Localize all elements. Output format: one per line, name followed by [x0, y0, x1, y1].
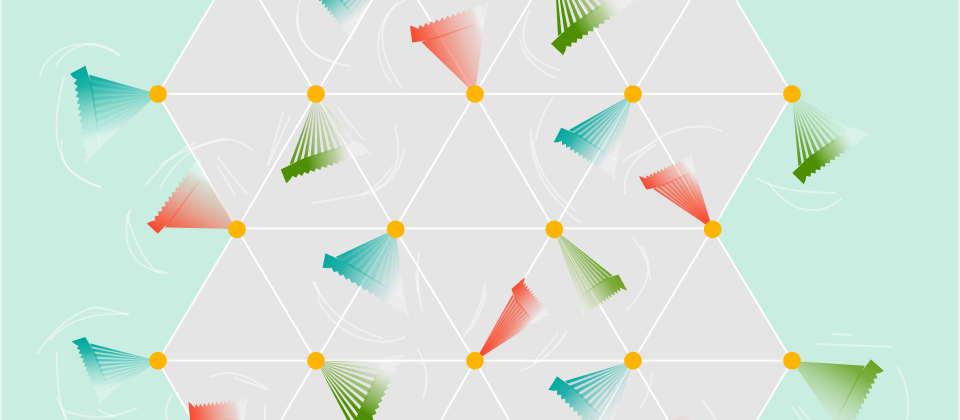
fan: green third node row two: [550, 220, 656, 376]
fan: red left node row two: [108, 153, 242, 236]
nodes: orange circles: [149, 85, 801, 370]
fan: red cropped at bottom: [187, 307, 248, 420]
fan: green second node row three: [307, 354, 451, 420]
fan: green right node row three: [785, 354, 937, 420]
fan: red centre node row three: [467, 230, 598, 367]
fan: teal fourth node row one: [534, 85, 636, 226]
fan: faint red tip at bottom edge: [672, 415, 692, 420]
fan: red above centre node: [408, 0, 489, 104]
fan: green second node row one: [280, 101, 356, 184]
panel: grey triangular grid area: [158, 0, 792, 420]
fan: teal cropped at top: [265, 0, 401, 72]
fan: teal second node row two: [321, 220, 409, 354]
triangular grid lines: [158, 0, 792, 420]
fan: green right node row one: [792, 98, 872, 184]
fan: teal fourth node row three: [524, 353, 637, 420]
fan: teal left node row three: [13, 336, 165, 405]
fan: green cropped at top: [546, 0, 646, 94]
fan: teal top-left node: [0, 64, 166, 165]
fan: red right node row two: [617, 104, 716, 237]
